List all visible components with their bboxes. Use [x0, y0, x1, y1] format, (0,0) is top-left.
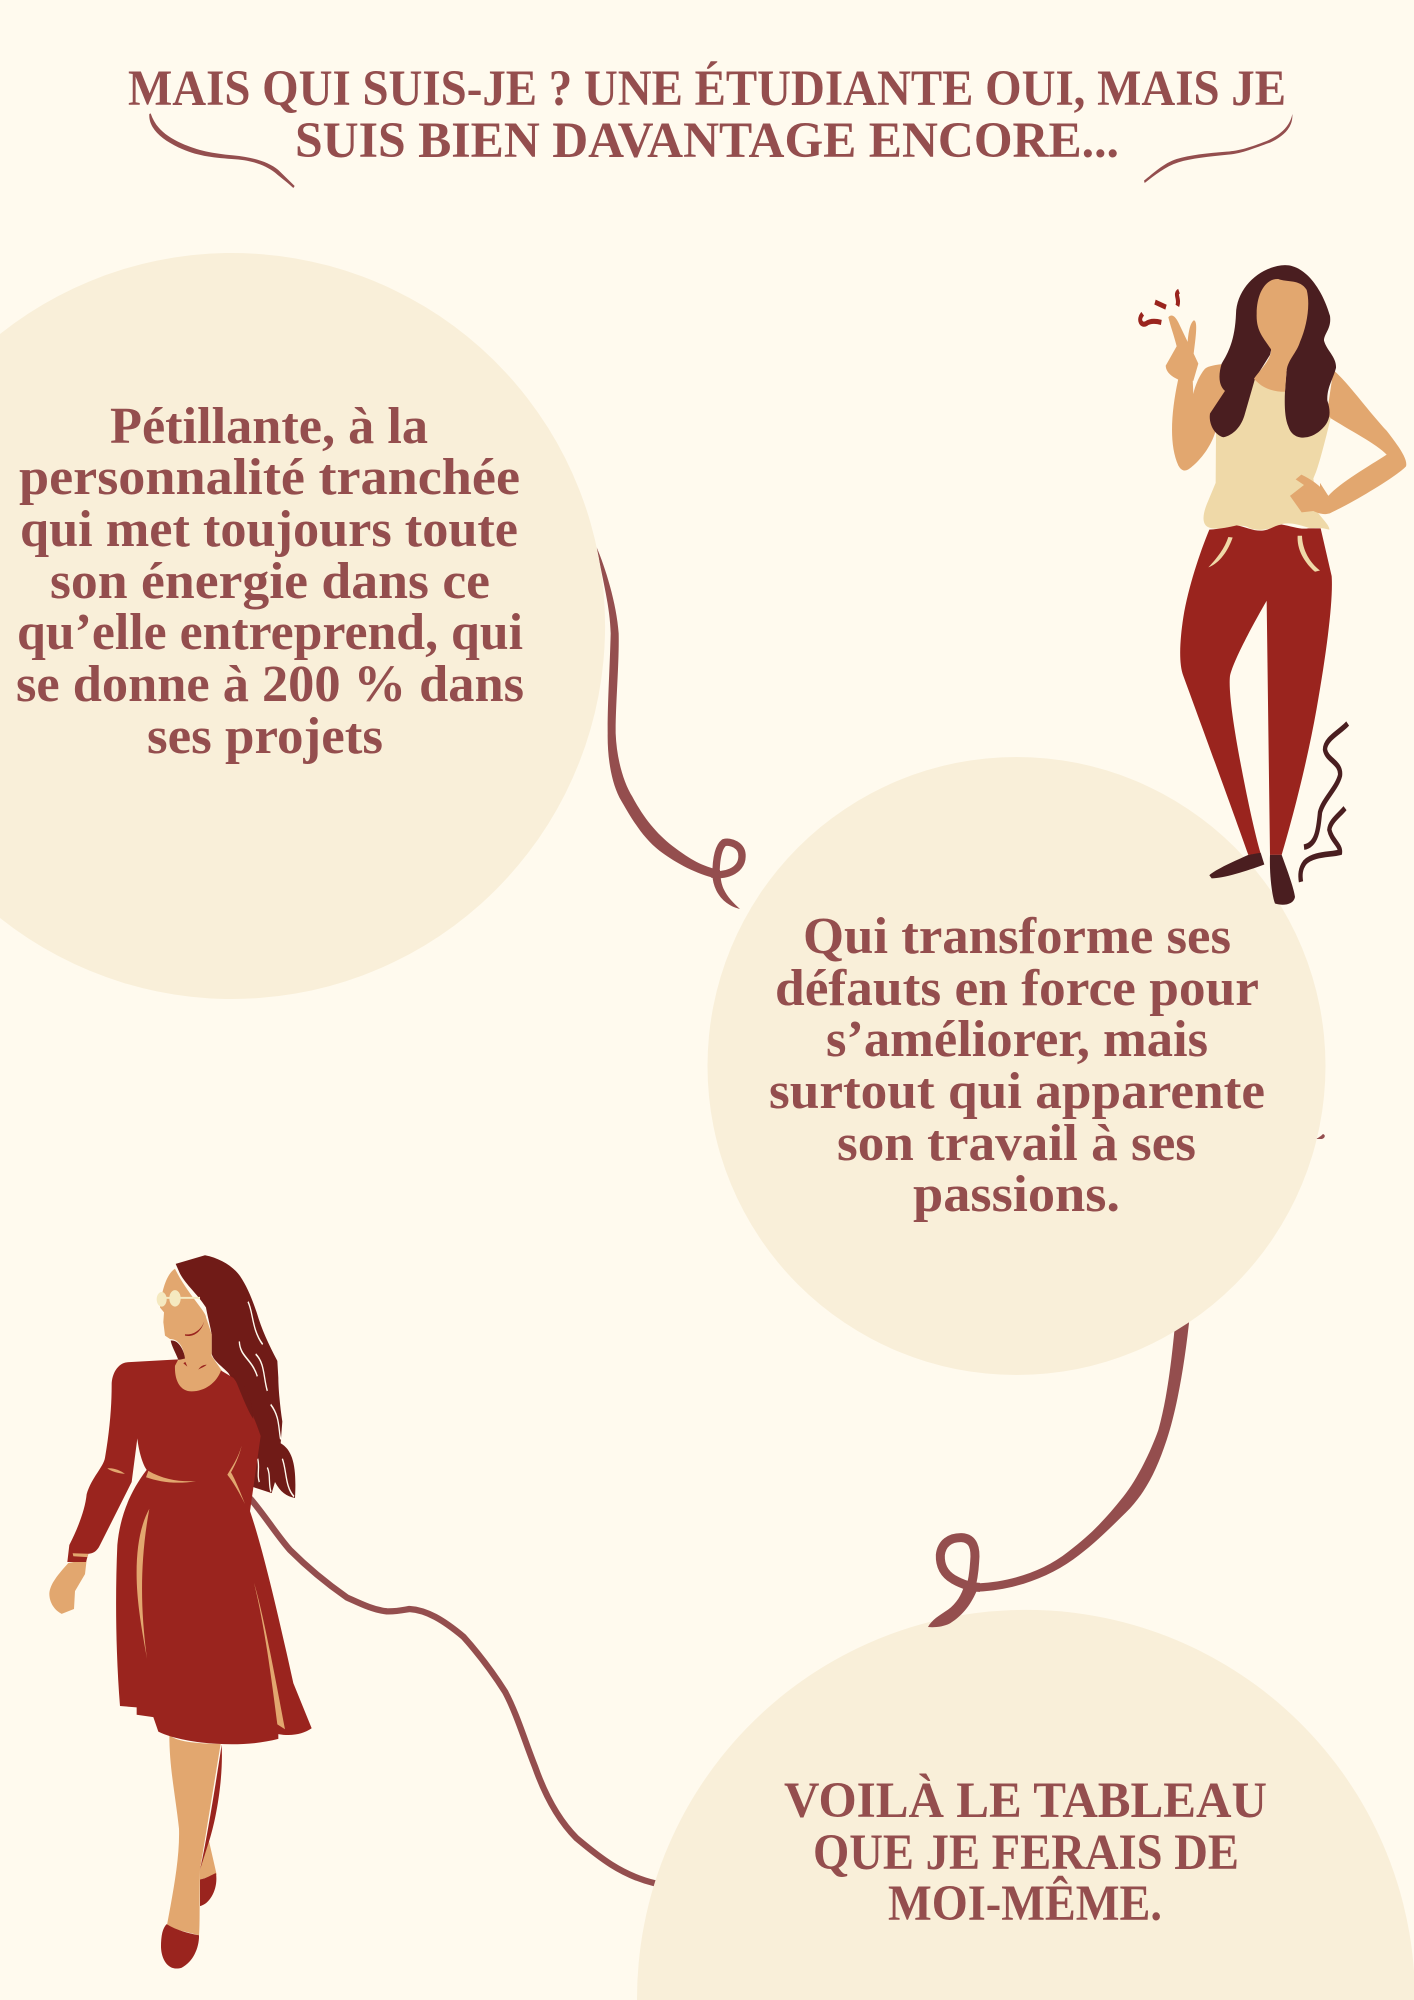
- front leg: [167, 1734, 221, 1935]
- text block: first circle: ses projets: [147, 708, 383, 765]
- text block: middle circle: son travail à ses: [837, 1115, 1196, 1172]
- sunglasses: [157, 1290, 200, 1307]
- circle: first panel background: [0, 253, 605, 999]
- hair: [1210, 265, 1336, 438]
- hair lock over dress: [233, 1375, 253, 1419]
- squiggle fragment behind middle circle: [1316, 1134, 1325, 1139]
- text block: first circle: personnalité tranchée: [19, 449, 520, 506]
- title: MAIS QUI SUIS-JE ? UNE ÉTUDIANTE OUI, MAIS JE: [128, 61, 1286, 117]
- hand on hip: [1290, 475, 1330, 514]
- text block: first circle: qu’elle entreprend, qui: [17, 604, 523, 661]
- text block: bottom circle: VOILÀ LE TABLEAU: [784, 1773, 1267, 1829]
- connector: curl from first circle to middle circle: [597, 547, 742, 909]
- connector: wavy line from woman to bottom circle: [250, 1498, 655, 1883]
- top: [1204, 379, 1331, 530]
- text block: middle circle: [769, 908, 1265, 1223]
- text block: first circle: son énergie dans ce: [50, 553, 490, 610]
- title swash left: [149, 113, 295, 188]
- face: [1254, 279, 1308, 392]
- circle: middle panel background: [708, 757, 1326, 1375]
- illustration: woman in red dress: [49, 1255, 312, 1969]
- pockets: [1208, 536, 1320, 572]
- arm on hip: [1320, 370, 1406, 513]
- dark squiggles: [1300, 724, 1348, 882]
- circle: bottom panel background: [637, 1610, 1414, 2000]
- hand: [49, 1560, 87, 1614]
- back leg: [200, 1838, 217, 1879]
- leg shadow: [200, 1745, 222, 1870]
- text block: first circle: se donne à 200 % dans: [16, 656, 524, 713]
- hair under chin: [171, 1340, 186, 1360]
- hair highlights: [239, 1302, 294, 1497]
- illustration: woman in top and red trousers: [1140, 265, 1406, 905]
- raised arm: [1172, 364, 1230, 471]
- face and neck: [160, 1269, 222, 1397]
- text block: bottom circle: MOI-MÊME.: [888, 1876, 1162, 1932]
- text block: middle circle: s’améliorer, mais: [826, 1011, 1208, 1068]
- fingers: [1166, 316, 1198, 381]
- text block: bottom circle: QUE JE FERAIS DE: [813, 1825, 1239, 1881]
- dress highlights: [73, 1446, 285, 1729]
- text block: middle circle: surtout qui apparente: [769, 1063, 1265, 1120]
- snap marks: [1140, 291, 1179, 324]
- dress: [67, 1359, 312, 1744]
- text block: middle circle: Qui transforme ses: [803, 908, 1231, 965]
- text block: middle circle: passions.: [913, 1166, 1120, 1223]
- title swash right: [1144, 114, 1292, 183]
- connector: curl from middle circle to bottom circle: [928, 1313, 1190, 1627]
- text block: middle circle: défauts en force pour: [775, 960, 1259, 1017]
- text block: first circle: Pétillante, à la: [110, 398, 428, 455]
- text block: bottom circle: [784, 1773, 1267, 1932]
- text block: first circle: [16, 398, 524, 765]
- text block: first circle: qui met toujours toute: [20, 501, 518, 558]
- jaw shadow: [183, 1321, 207, 1370]
- shoes: [1209, 853, 1295, 905]
- hair: [176, 1255, 295, 1498]
- trousers: [1180, 524, 1332, 855]
- title: [128, 61, 1286, 169]
- shoes: [161, 1873, 216, 1969]
- title: SUIS BIEN DAVANTAGE ENCORE...: [295, 113, 1119, 169]
